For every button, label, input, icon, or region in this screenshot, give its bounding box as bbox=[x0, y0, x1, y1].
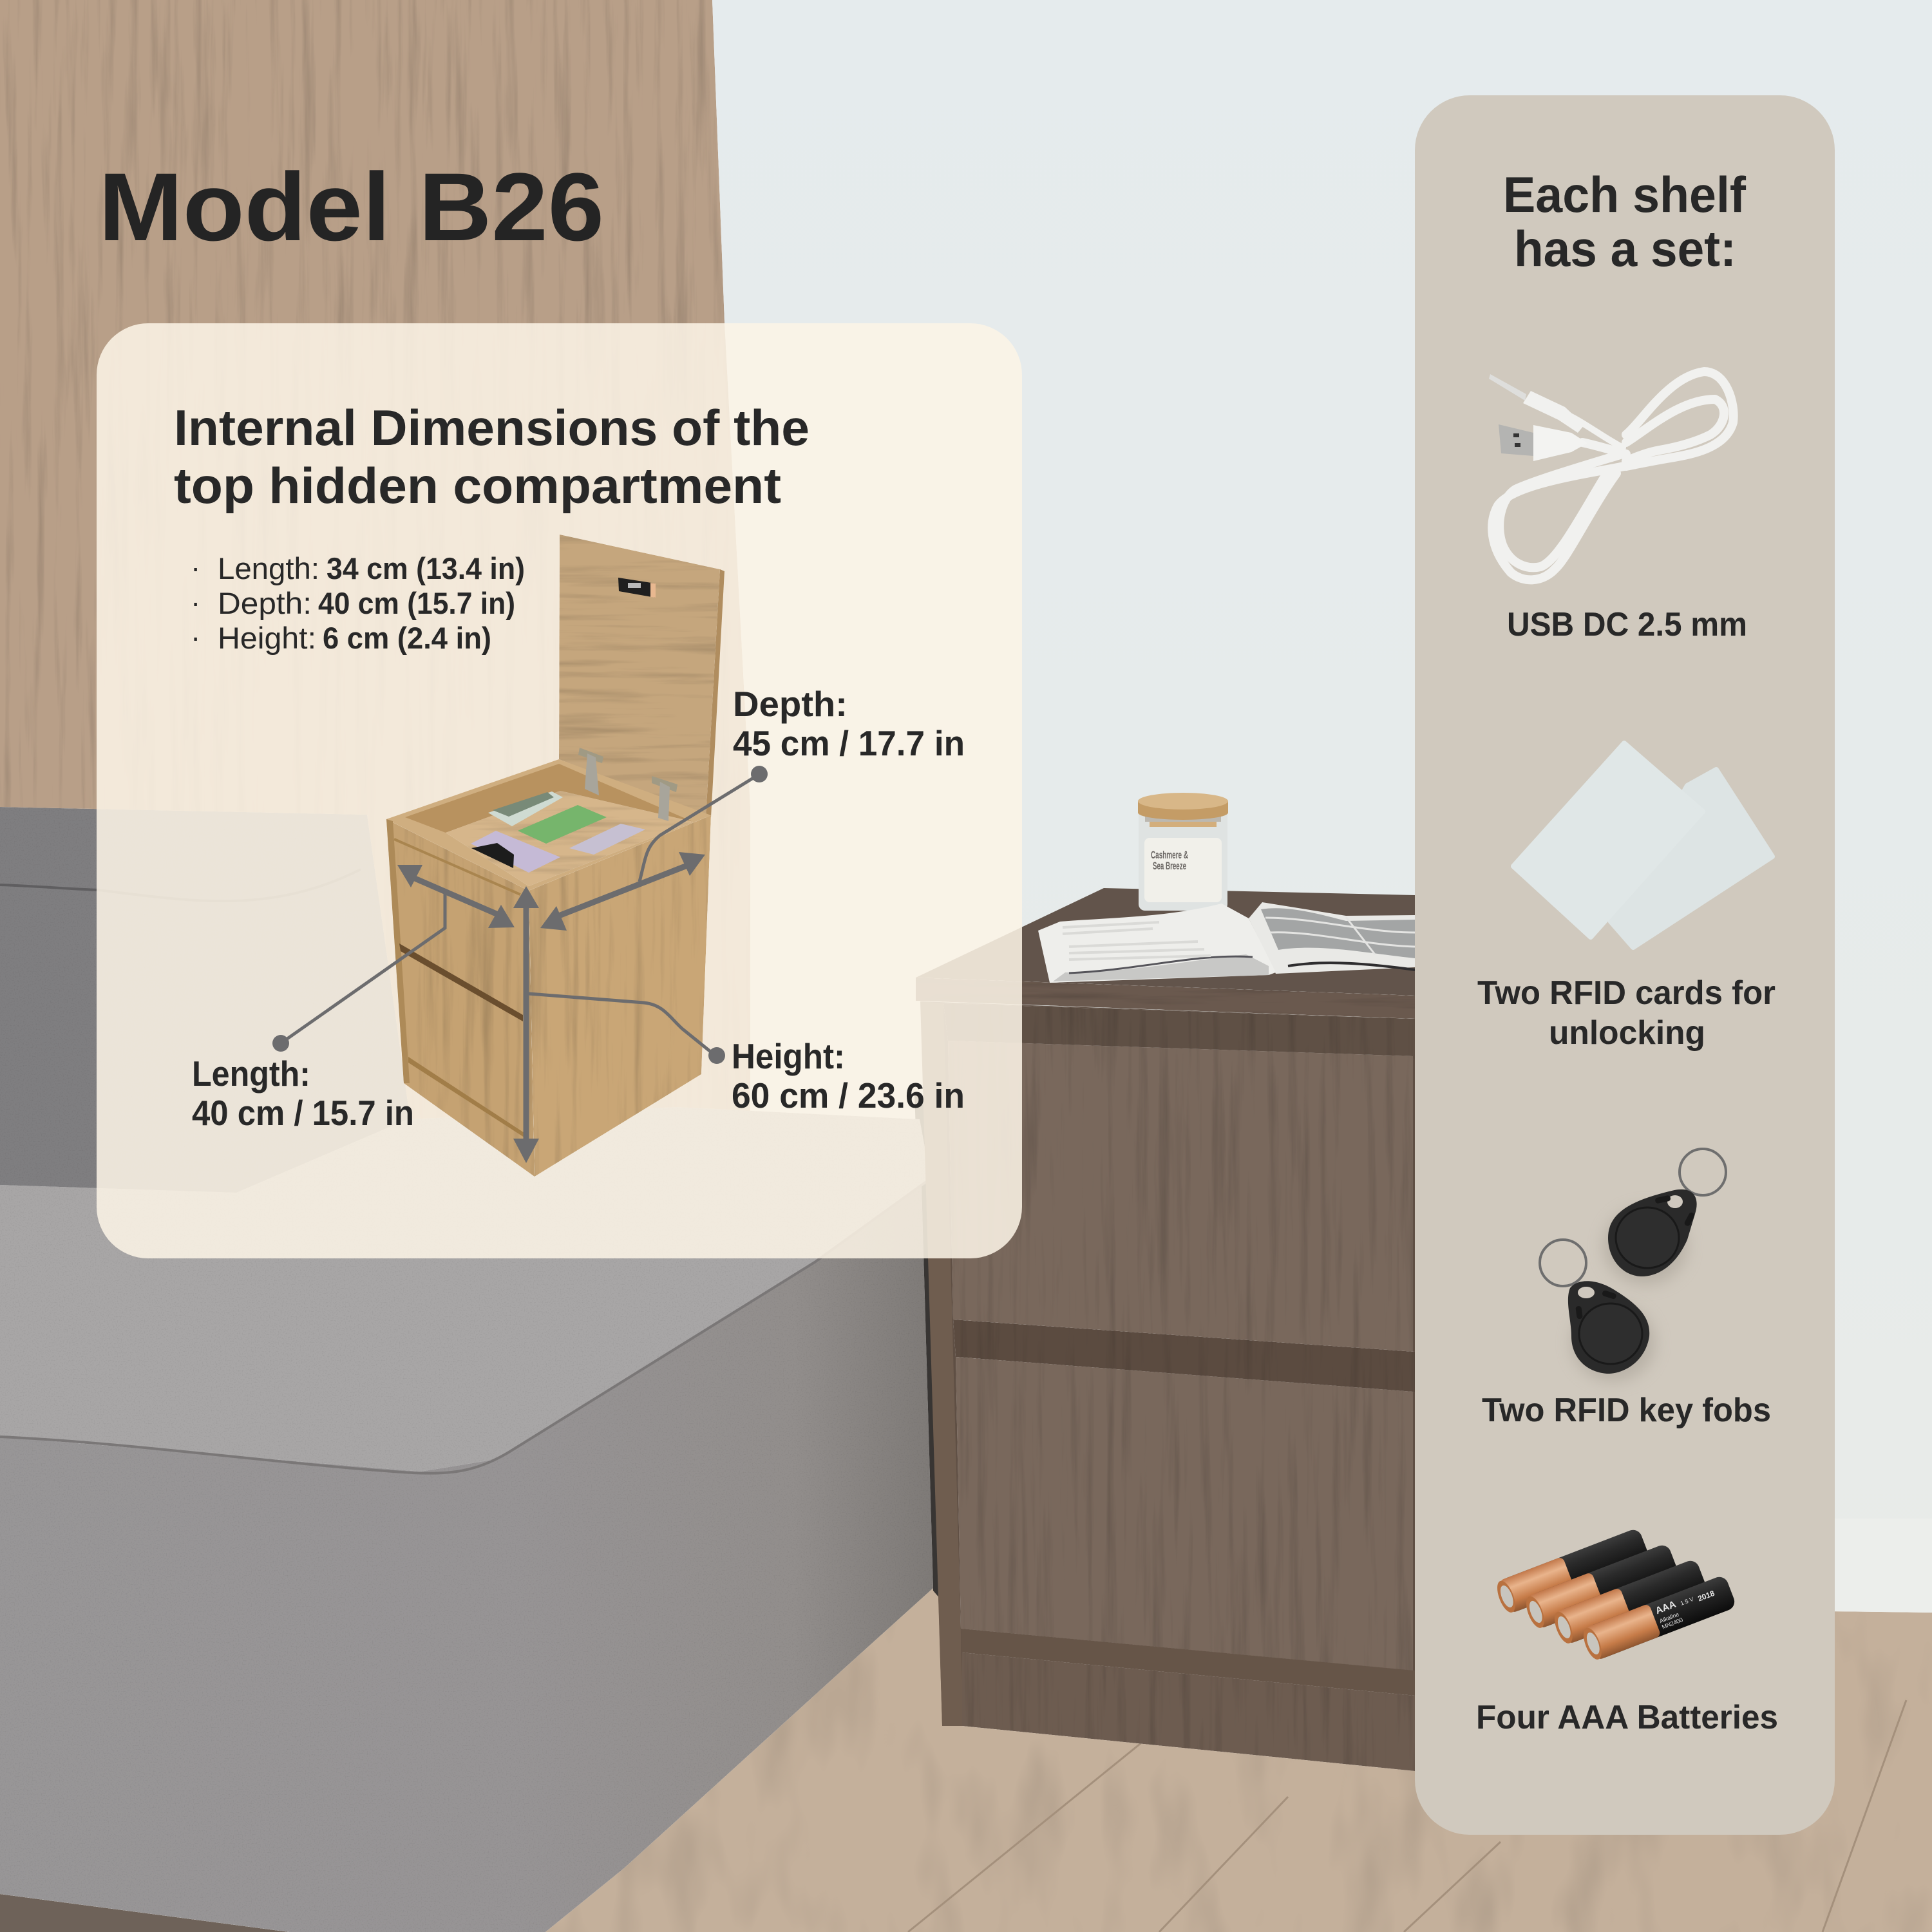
panel heading: Each shelf bbox=[1503, 166, 1747, 223]
callout: height: Height: bbox=[732, 1036, 845, 1076]
candle jar: Cashmere & bbox=[1151, 849, 1188, 861]
baseboard bbox=[1829, 1519, 1932, 1613]
bullet list of compartment sizes bbox=[191, 551, 525, 655]
arrow: depth bbox=[540, 852, 705, 931]
lid lock bbox=[618, 578, 656, 598]
wood wall panel bbox=[0, 0, 750, 1133]
callout: height bbox=[529, 994, 965, 1115]
label: RFID cards: Two RFID cards for bbox=[1477, 974, 1776, 1012]
oak cabinet with open lid bbox=[386, 535, 724, 1177]
sofa back cushion bbox=[0, 807, 412, 1224]
label: key fobs: Two RFID key fobs bbox=[1482, 1392, 1771, 1429]
label: USB DC: USB DC 2.5 mm bbox=[1507, 606, 1747, 643]
battery 4: AAA bbox=[1654, 1598, 1678, 1616]
sofa seat top bbox=[0, 1107, 931, 1472]
label: RFID cards: unlocking bbox=[1549, 1014, 1705, 1052]
bullet list of compartment sizes: · bbox=[191, 585, 200, 619]
panel heading: has a set: bbox=[1514, 220, 1736, 277]
bullet list of compartment sizes: 34 cm (13.4 in) bbox=[327, 551, 525, 585]
icon: USB DC cable bbox=[1489, 372, 1734, 580]
dark wood nightstand bbox=[916, 888, 1415, 1771]
bullet list of compartment sizes: 40 cm (15.7 in) bbox=[318, 586, 515, 620]
bullet list of compartment sizes: 6 cm (2.4 in) bbox=[323, 621, 491, 655]
bullet list of compartment sizes: Length: bbox=[218, 551, 319, 585]
bullet list of compartment sizes: · bbox=[191, 551, 200, 584]
bottom shadow bbox=[0, 1894, 289, 1932]
arrow: height bbox=[513, 886, 539, 1163]
panel heading: top hidden compartment bbox=[174, 457, 781, 514]
sofa side and front bbox=[0, 1119, 933, 1932]
drawer gap bbox=[399, 943, 523, 1021]
callout: length: 40 cm / 15.7 in bbox=[192, 1093, 414, 1133]
battery 4: MN2400 bbox=[1661, 1616, 1683, 1631]
sofa seam bbox=[0, 869, 361, 901]
battery 4 bbox=[1580, 1575, 1737, 1662]
top rim line bbox=[394, 839, 520, 895]
wooden floor bbox=[502, 1546, 1932, 1932]
callout: depth bbox=[639, 684, 965, 882]
label: batteries: Four AAA Batteries bbox=[1476, 1699, 1778, 1736]
callout: length bbox=[192, 893, 445, 1133]
callout: depth: Depth: bbox=[733, 684, 848, 724]
hinges bbox=[578, 748, 677, 821]
battery 3 bbox=[1551, 1558, 1708, 1646]
icon: RFID key fobs bbox=[1540, 1149, 1726, 1381]
arrow: length bbox=[397, 865, 515, 928]
callout: height: 60 cm / 23.6 in bbox=[732, 1075, 965, 1115]
battery 1 bbox=[1493, 1528, 1651, 1615]
open magazine bbox=[1038, 902, 1415, 983]
panel heading bbox=[174, 399, 810, 514]
candle jar bbox=[1138, 793, 1228, 911]
panel heading: Internal Dimensions of the bbox=[174, 399, 810, 456]
icon: four AAA batteries bbox=[1493, 1528, 1737, 1662]
seat piping bbox=[0, 1179, 931, 1473]
panel heading bbox=[1503, 166, 1747, 277]
bullet list of compartment sizes: Depth: bbox=[218, 586, 312, 620]
banknotes in compartment bbox=[471, 791, 645, 873]
bullet list of compartment sizes: Height: bbox=[218, 621, 316, 655]
panel: internal dimensions bbox=[97, 323, 1022, 1258]
label: RFID cards bbox=[1477, 974, 1776, 1052]
gap shadow by nightstand bbox=[914, 1095, 961, 1623]
heading: Model B26: Model B26 bbox=[99, 153, 604, 261]
battery 2 bbox=[1522, 1543, 1680, 1631]
battery 4: 2018 bbox=[1696, 1589, 1716, 1603]
callout: depth: 45 cm / 17.7 in bbox=[733, 723, 965, 763]
battery 4: 1.5 V bbox=[1680, 1596, 1694, 1607]
panel: each shelf has a set bbox=[1415, 95, 1835, 1835]
icon: RFID cards bbox=[1513, 743, 1772, 947]
bullet list of compartment sizes: · bbox=[191, 620, 200, 654]
candle jar: Sea Breeze bbox=[1153, 860, 1186, 872]
callout: length: Length: bbox=[192, 1054, 310, 1094]
battery 4: Alkaline bbox=[1659, 1611, 1680, 1624]
grey sofa bbox=[0, 807, 961, 1932]
